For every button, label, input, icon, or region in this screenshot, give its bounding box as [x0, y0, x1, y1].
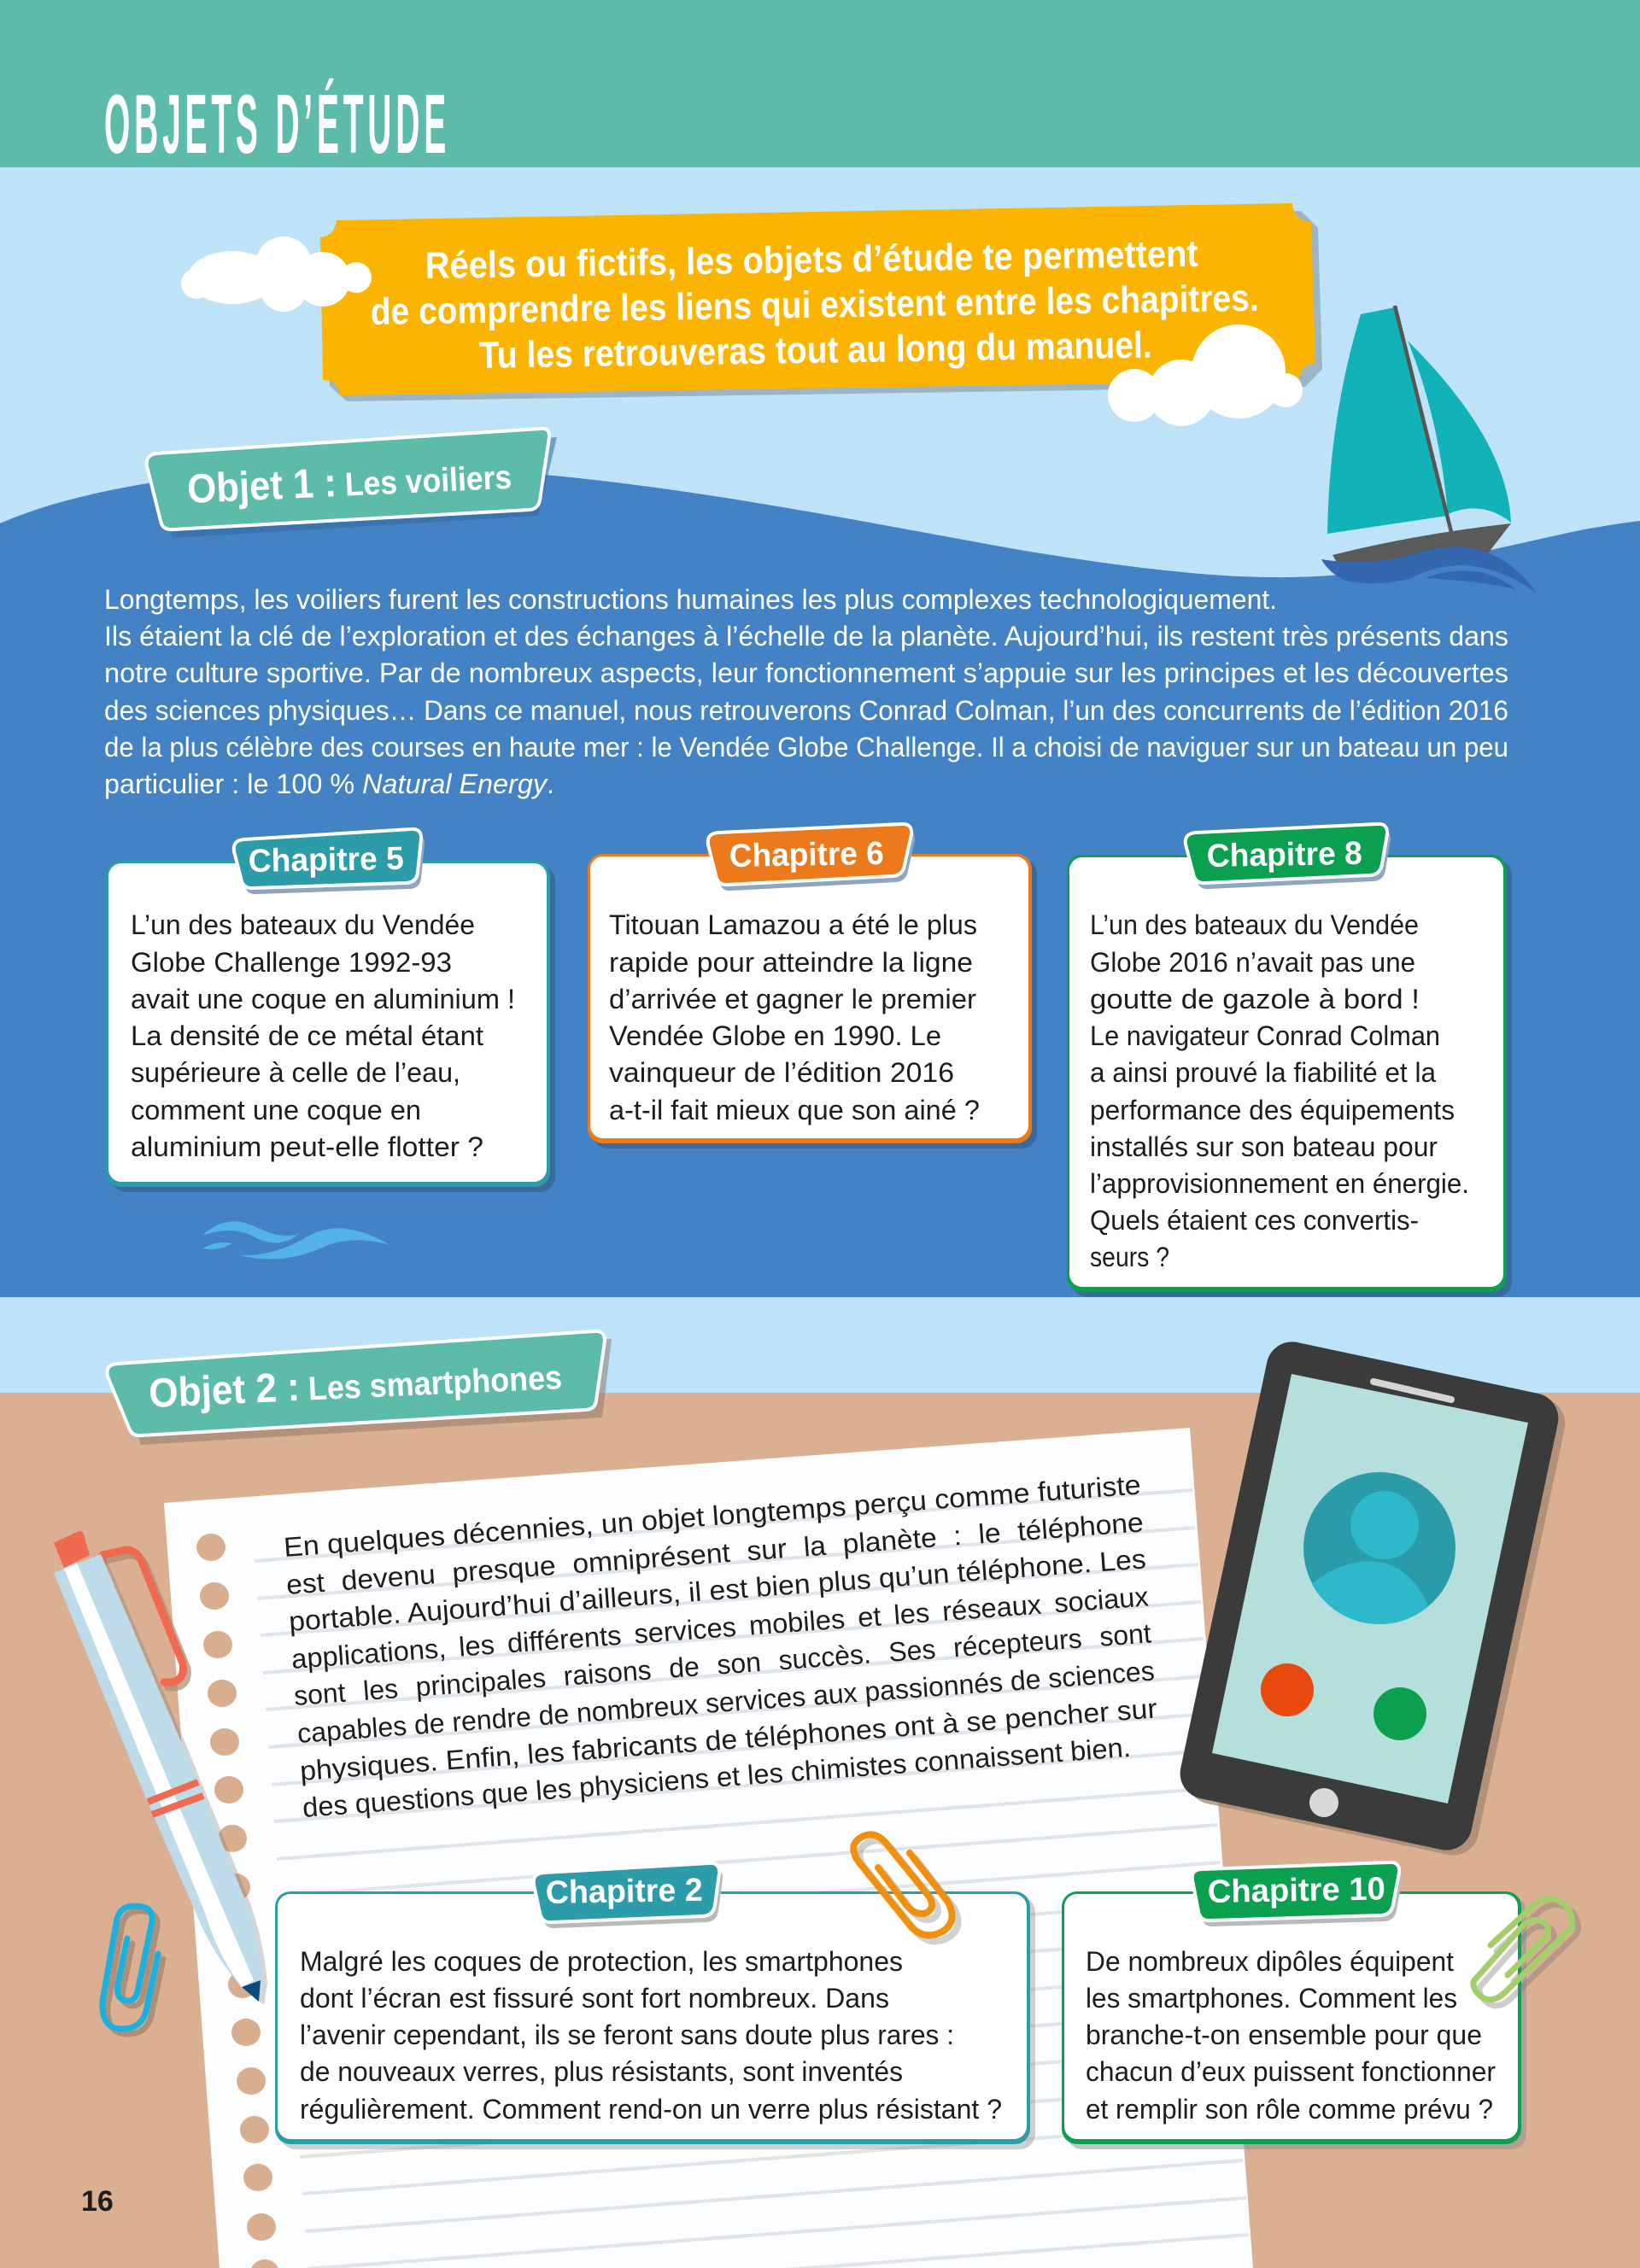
- sea: [0, 466, 1640, 1297]
- text: installés sur son bateau pour: [1090, 1131, 1438, 1162]
- punch holes: [196, 1534, 279, 2268]
- intro paragraph: notre culture sportive. Par de nombreux aspects, leur fonctionnement s’appuie sur les principes et les découvertes: [104, 658, 1508, 688]
- home button: [1309, 1788, 1338, 1817]
- text: aluminium peut-elle flotter ?: [131, 1131, 483, 1162]
- intro paragraph: Longtemps, les voiliers furent les constructions humaines les plus complexes technologiquement.: [104, 584, 1277, 615]
- text: [131, 909, 515, 1162]
- cloud right: [1108, 324, 1303, 426]
- text: [1086, 1946, 1496, 2125]
- banner text: de comprendre les liens qui existent entre les chapitres.: [370, 278, 1259, 333]
- text: OBJETS D’ÉTUDE: [104, 77, 450, 171]
- text: vainqueur de l’édition 2016: [609, 1057, 954, 1088]
- text: les smartphones. Comment les: [1086, 1983, 1457, 2014]
- text: L’un des bateaux du Vendée: [1090, 909, 1419, 940]
- header band: [0, 0, 1640, 167]
- intro paragraph: [104, 584, 1508, 799]
- tab: chapitre 2: [534, 1863, 723, 1928]
- label: objet 1: Objet 1 : Les voiliers: [186, 453, 512, 512]
- text: L’un des bateaux du Vendée: [131, 909, 475, 940]
- text: Globe 2016 n’avait pas une: [1090, 947, 1415, 978]
- banner text: Réels ou fictifs, les objets d’étude te permettent: [425, 233, 1198, 287]
- red button: [1261, 1663, 1314, 1716]
- text: et remplir son rôle comme prévu ?: [1086, 2094, 1493, 2125]
- page number: 16: [81, 2185, 114, 2218]
- text: dont l’écran est fissuré sont fort nombreux. Dans: [300, 1983, 889, 2014]
- tab: chapitre 10: [1192, 1862, 1403, 1926]
- paperclip: orange: [853, 1834, 958, 1941]
- cloud left: [181, 237, 372, 312]
- jib sail: [1408, 341, 1511, 523]
- text: a-t-il fait mieux que son ainé ?: [609, 1095, 980, 1125]
- screen: [1212, 1374, 1528, 1803]
- text: performance des équipements: [1090, 1095, 1455, 1125]
- paragraph on paper: capables de rendre de nombreux services aux passionnés de sciences: [296, 1655, 1156, 1749]
- text: Malgré les coques de protection, les smartphones: [300, 1946, 903, 1977]
- speaker: [1374, 1382, 1451, 1400]
- label: objet 2: [107, 1331, 612, 1445]
- card: chapitre 2: [275, 1863, 1035, 2149]
- pen: [54, 1531, 267, 2005]
- text: comment une coque en: [131, 1095, 421, 1125]
- label: objet 2: Objet 2 : Les smartphones: [148, 1353, 563, 1417]
- paragraph on paper: [283, 1469, 1158, 1823]
- paragraph on paper: des questions que les physiciens et les chimistes connaissent bien.: [302, 1732, 1132, 1823]
- paperclip: green: [1473, 1898, 1578, 2006]
- main sail: [1327, 307, 1447, 534]
- intro paragraph: de la plus célèbre des courses en haute mer : le Vendée Globe Challenge. Il a choisi de naviguer sur un bateau un peu: [104, 732, 1508, 763]
- text: [609, 909, 980, 1125]
- text: avait une coque en aluminium !: [131, 984, 515, 1014]
- text: chacun d’eux puissent fonctionner: [1086, 2056, 1496, 2087]
- intro paragraph: particulier : le 100 % Natural Energy.: [104, 769, 554, 799]
- text: supérieure à celle de l’eau,: [131, 1057, 460, 1088]
- card: chapitre 10: [1062, 1862, 1526, 2149]
- text: [1090, 909, 1469, 1272]
- paragraph on paper: En quelques décennies, un objet longtemps perçu comme futuriste: [283, 1469, 1142, 1563]
- paragraph on paper: est devenu presque omniprésent sur la planète : le téléphone: [285, 1506, 1145, 1600]
- card: chapitre 5: [106, 829, 555, 1192]
- paragraph on paper: physiques. Enfin, les fabricants de téléphones ont à se pencher sur: [299, 1692, 1158, 1786]
- hull: [1332, 523, 1511, 568]
- paragraph on paper: applications, les différents services mobiles et les réseaux sociaux: [290, 1581, 1150, 1675]
- desk: [0, 1393, 1640, 2268]
- text: Globe Challenge 1992-93: [131, 947, 452, 978]
- mast: [1395, 306, 1451, 532]
- banner text: Tu les retrouveras tout au long du manuel.: [478, 324, 1152, 377]
- small waves: [202, 1221, 390, 1259]
- text: [300, 1946, 1002, 2125]
- tab: chapitre 5: [234, 829, 425, 894]
- intro paragraph: Ils étaient la clé de l’exploration et des échanges à l’échelle de la planète. Aujourd’hui, ils restent très présents dans: [104, 621, 1508, 652]
- text: Vendée Globe en 1990. Le: [609, 1020, 941, 1051]
- text: rapide pour atteindre la ligne: [609, 947, 973, 978]
- text: d’arrivée et gagner le premier: [609, 984, 976, 1014]
- intro banner: [320, 203, 1322, 401]
- sheet of lined paper: [164, 1428, 1253, 2268]
- card: chapitre 8: [1067, 824, 1512, 1297]
- text: régulièrement. Comment rend-on un verre plus résistant ?: [300, 2094, 1002, 2125]
- sky background: [0, 167, 1640, 1397]
- tab: chapitre 8: [1186, 824, 1391, 889]
- text: seurs ?: [1090, 1242, 1169, 1272]
- text: l’approvisionnement en énergie.: [1090, 1168, 1469, 1199]
- tab: chapitre 10: Chapitre 10: [1207, 1871, 1385, 1910]
- paperclip: blue: [102, 1906, 163, 2034]
- wave under boat: [1321, 547, 1537, 593]
- paragraph on paper: sont les principales raisons de son succès. Ses récepteurs sont: [293, 1617, 1152, 1711]
- text: branche-t-on ensemble pour que: [1086, 2020, 1482, 2050]
- text: Quels étaient ces convertis-: [1090, 1205, 1419, 1236]
- text: La densité de ce métal étant: [131, 1020, 483, 1051]
- text: Le navigateur Conrad Colman: [1090, 1020, 1440, 1051]
- banner text: [370, 233, 1259, 377]
- card: chapitre 6: [588, 824, 1037, 1149]
- tab: chapitre 2: Chapitre 2: [545, 1873, 703, 1911]
- text: a ainsi prouvé la fiabilité et la: [1090, 1057, 1436, 1088]
- tab: chapitre 5: Chapitre 5: [248, 841, 404, 880]
- tab: chapitre 8: Chapitre 8: [1206, 836, 1362, 874]
- pen cap: [54, 1531, 90, 1568]
- text: De nombreux dipôles équipent: [1086, 1946, 1454, 1977]
- text: de nouveaux verres, plus résistants, sont inventés: [300, 2056, 903, 2087]
- pen tip: [242, 1980, 261, 2002]
- pen body: [59, 1558, 267, 2005]
- pen stripe: [64, 1563, 254, 1987]
- avatar: [1303, 1472, 1456, 1624]
- sailboat: [1321, 306, 1537, 593]
- green button: [1374, 1687, 1426, 1740]
- text: Titouan Lamazou a été le plus: [609, 909, 977, 940]
- paragraph on paper: portable. Aujourd’hui d’ailleurs, il est bien plus qu’un téléphone. Les: [288, 1543, 1147, 1637]
- intro paragraph: des sciences physiques… Dans ce manuel, nous retrouverons Conrad Colman, l’un des concurrents de l’édition 2016: [104, 695, 1508, 726]
- smartphone: [1175, 1337, 1570, 1860]
- text: goutte de gazole à bord !: [1090, 984, 1420, 1014]
- tab: chapitre 6: Chapitre 6: [729, 836, 884, 874]
- pen bands: [148, 1782, 203, 1815]
- text: l’avenir cependant, ils se feront sans doute plus rares :: [300, 2020, 954, 2050]
- pen clip: [102, 1550, 187, 1687]
- label: objet 1: [147, 429, 557, 538]
- tab: chapitre 6: [708, 824, 915, 891]
- ruled lines: [255, 1490, 1251, 2268]
